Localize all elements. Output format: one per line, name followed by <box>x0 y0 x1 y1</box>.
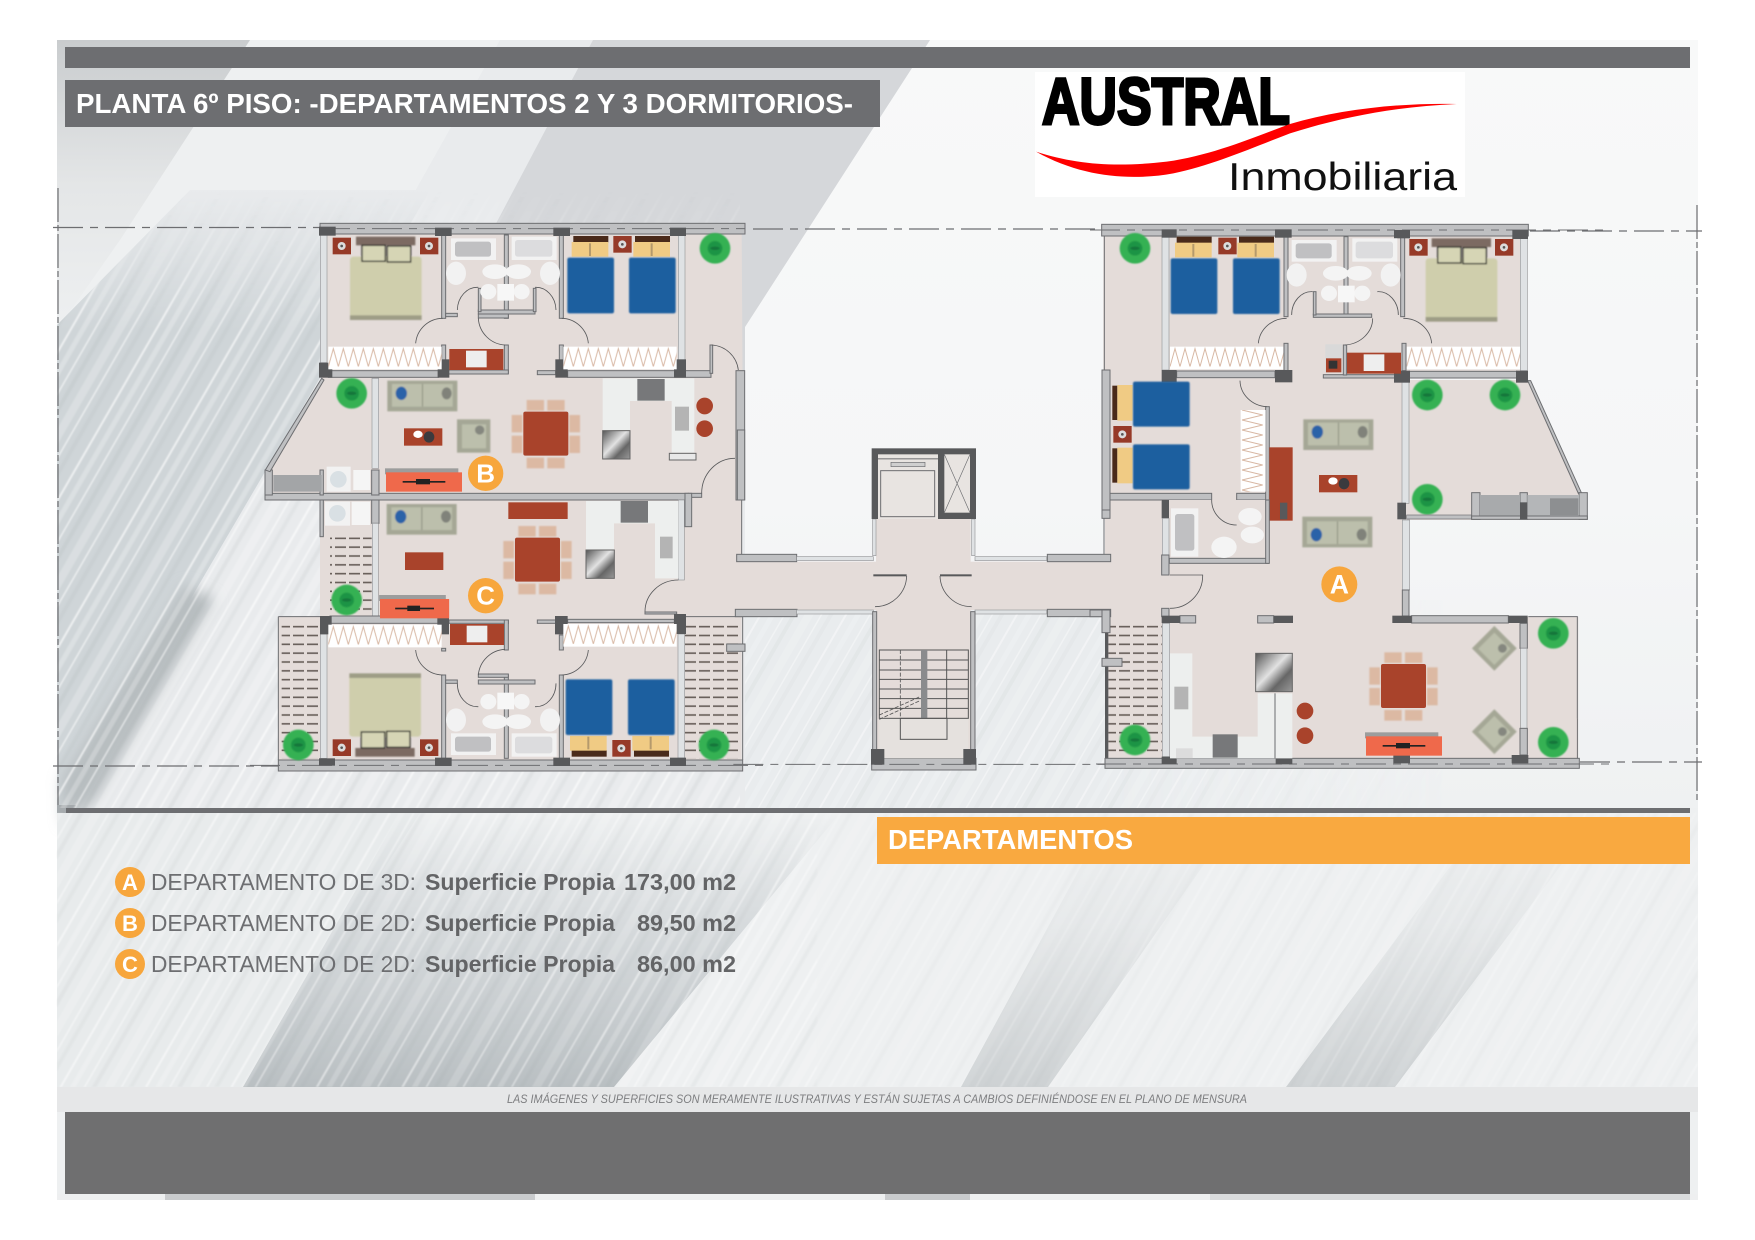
A: closets upper <box>1170 347 1520 492</box>
C: closets <box>328 624 677 647</box>
C: terraces <box>282 537 740 758</box>
A: marker <box>1321 566 1357 602</box>
A: columns upper <box>1162 229 1528 383</box>
legend row B: Superficie Propia <box>425 910 616 936</box>
A: living and dining furniture <box>1120 517 1569 758</box>
B: laundry balcony <box>273 467 370 492</box>
divider rule <box>66 808 1690 813</box>
legend row C <box>115 949 736 979</box>
legend row B: 89,50 m2 <box>637 910 736 936</box>
C: doors <box>416 580 678 707</box>
hall walls <box>733 430 1117 770</box>
C: walls <box>250 493 763 771</box>
legend <box>115 867 736 979</box>
C: laundry <box>325 502 370 526</box>
A: terrace deck <box>1108 621 1162 758</box>
C: living room furniture <box>283 502 729 760</box>
legend row B: B <box>122 911 138 936</box>
bottom grey bar <box>65 1112 1690 1194</box>
A: bedrooms furniture <box>1112 237 1513 489</box>
legend row C: DEPARTAMENTO DE 2D: <box>151 951 416 977</box>
B: walls <box>265 223 745 500</box>
orange heading: DEPARTAMENTOS <box>877 817 1690 864</box>
apartment C plan <box>250 493 763 771</box>
top grey bar <box>65 47 1690 68</box>
legend row C: 86,00 m2 <box>637 951 736 977</box>
stairs <box>879 650 968 758</box>
core columns <box>871 749 976 765</box>
floors <box>265 230 1587 760</box>
A: marker: A <box>1330 570 1349 600</box>
legend row A: 173,00 m2 <box>624 869 736 895</box>
A upper half <box>1090 224 1610 521</box>
C: bedroom furniture <box>333 624 675 757</box>
legend row C: Superficie Propia <box>425 951 616 977</box>
A: secondary bath <box>1171 508 1264 558</box>
B: marker <box>468 456 503 491</box>
legend row A: DEPARTAMENTO DE 3D: <box>151 869 416 895</box>
A: walls upper <box>1090 224 1610 510</box>
legend row A <box>115 867 736 897</box>
legend row B <box>115 908 736 938</box>
title bar: PLANTA 6º PISO: -DEPARTAMENTOS 2 Y 3 DORMITORIOS- <box>76 88 853 119</box>
reference axis lines <box>53 188 1702 805</box>
A: kitchen <box>1170 653 1313 758</box>
A: doors upper <box>1240 292 1432 407</box>
B: living room furniture <box>336 233 730 492</box>
logo: Austral Inmobiliaria: AUSTRAL <box>1042 64 1290 138</box>
legend row A: Superficie Propia <box>425 869 616 895</box>
C: columns <box>319 614 686 766</box>
B: marker: B <box>476 458 495 488</box>
legend row C: C <box>122 952 138 977</box>
disclaimer: LAS IMÁGENES Y SUPERFICIES SON MERAMENTE ILUSTRATIVAS Y ESTÁN SUJETAS A CAMBIOS DEFINIÉNDOSE EN EL PLANO DE MENSURA <box>507 1093 1247 1106</box>
elevator <box>872 448 976 519</box>
B: closets <box>328 347 677 369</box>
A: walls lower <box>1090 493 1610 768</box>
hall doors <box>875 576 972 607</box>
B: doors <box>416 287 738 493</box>
A lower half <box>1090 493 1610 768</box>
apartment B plan <box>265 223 745 500</box>
legend row B: DEPARTAMENTO DE 2D: <box>151 910 416 936</box>
C: marker <box>468 578 503 613</box>
B: columns <box>319 227 686 378</box>
apartment A plan <box>1090 224 1610 768</box>
A: living furniture upper <box>1120 233 1520 521</box>
A: doors lower <box>1170 500 1237 608</box>
A: columns lower <box>1162 502 1528 764</box>
logo: Austral Inmobiliaria <box>1035 64 1465 199</box>
B: kitchen <box>603 378 713 460</box>
C: kitchen <box>586 501 678 578</box>
C: marker: C <box>476 581 495 611</box>
core: elevator, stairs and hall <box>733 430 1117 770</box>
logo: Austral Inmobiliaria: Inmobiliaria <box>1228 156 1457 199</box>
B: bedroom furniture <box>333 236 676 370</box>
orange heading: DEPARTAMENTOS: DEPARTAMENTOS <box>888 824 1133 855</box>
title bar <box>65 80 880 127</box>
legend row A: A <box>122 870 138 895</box>
